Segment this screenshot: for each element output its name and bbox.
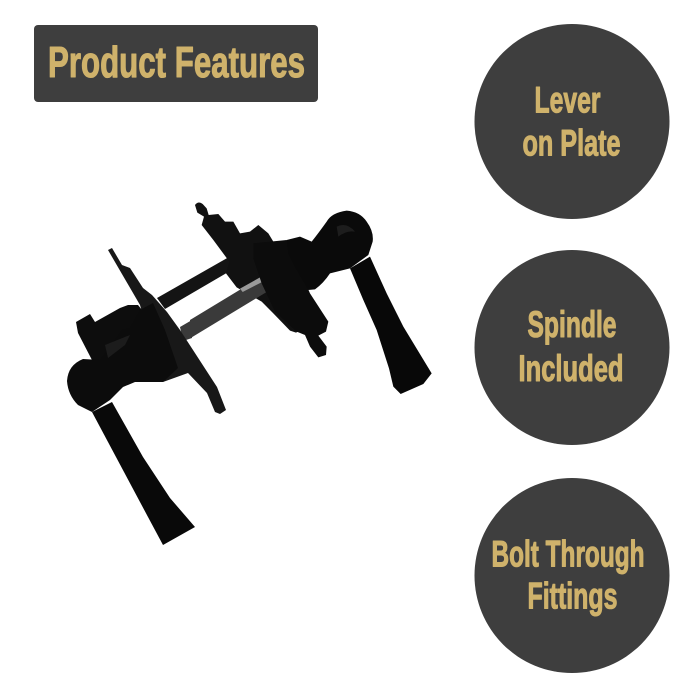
left back block: [76, 305, 160, 365]
black spindle: [157, 253, 242, 309]
right knob: [287, 211, 373, 290]
knob sheen: [337, 225, 355, 237]
feature circle: Bolt Through Fittings: [474, 478, 670, 673]
feature circle: Spindle Included: [474, 250, 670, 445]
right handle assembly: [190, 203, 432, 394]
left knob: [67, 303, 178, 412]
feature circle: Lever on Plate: Lever: [534, 80, 600, 120]
left plate: [108, 248, 226, 414]
left handle assembly: [67, 248, 226, 545]
heading: Product Features: Product Features: [48, 38, 305, 87]
spindle highlight: [240, 274, 267, 292]
feature circle: Spindle Included: Spindle: [528, 304, 616, 345]
left lever: [92, 402, 195, 545]
front right rosette: [253, 240, 328, 357]
left knob sheen: [105, 335, 130, 358]
grey spindle left section: [180, 320, 192, 341]
feature circle: Lever on Plate: on Plate: [522, 122, 620, 164]
back right plate: [195, 203, 302, 333]
right lever: [350, 257, 432, 394]
feature circle: Lever on Plate: [474, 24, 670, 219]
feature circle: Bolt Through Fittings: Fittings: [528, 576, 618, 616]
heading: Product Features: [34, 25, 318, 102]
grey spindle section: [190, 274, 270, 338]
product photo: door lever handles on plates with spindles: [67, 203, 432, 545]
feature circle: Spindle Included: Included: [518, 348, 624, 389]
